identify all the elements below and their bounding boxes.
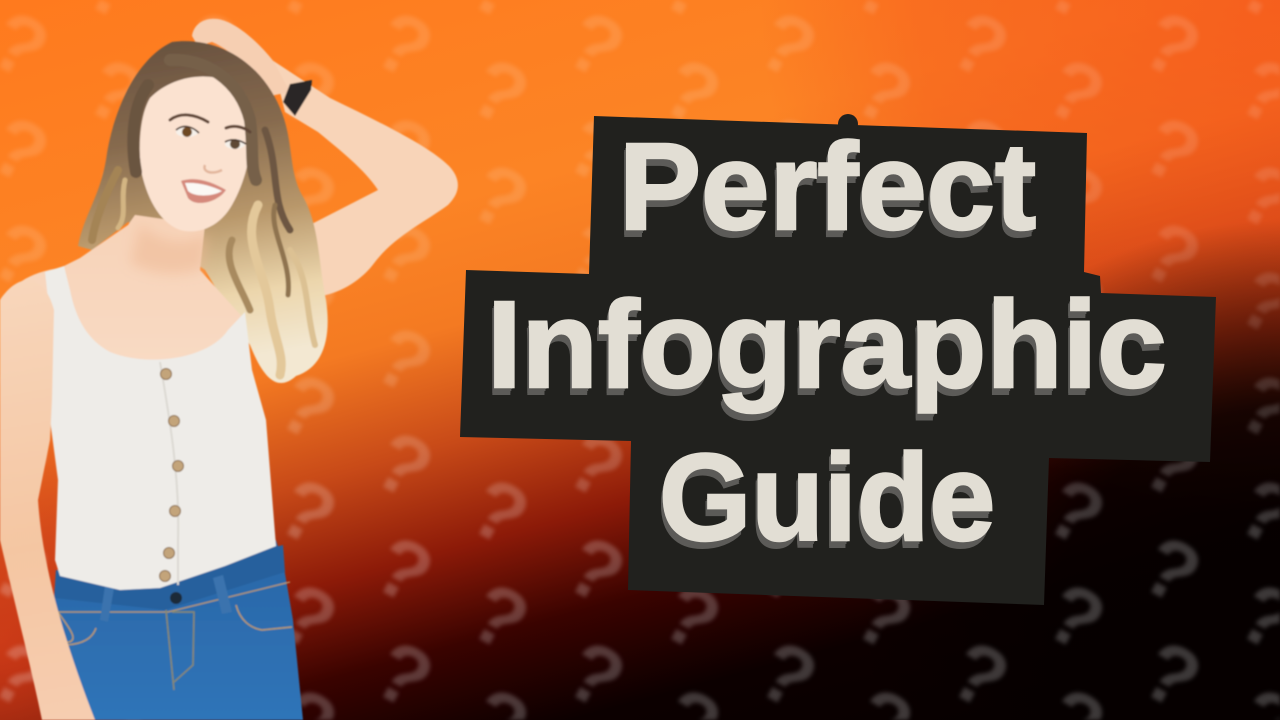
title: Infographic: Infographic xyxy=(487,277,1167,414)
facial features xyxy=(170,115,250,203)
title: Perfect: Perfect xyxy=(619,119,1036,256)
hand in hair xyxy=(192,19,290,96)
lowered arm xyxy=(0,280,95,720)
jeans xyxy=(54,540,303,720)
shirt buttons xyxy=(160,368,184,582)
raised arm xyxy=(272,60,458,296)
white tank top xyxy=(45,266,276,590)
wristwatch xyxy=(283,80,312,116)
neck shading xyxy=(130,225,208,274)
hair back xyxy=(78,41,328,383)
front hair strands xyxy=(92,60,315,375)
torso and shoulder skin xyxy=(0,215,250,400)
face xyxy=(140,77,251,231)
title: Guide: Guide xyxy=(659,430,995,567)
